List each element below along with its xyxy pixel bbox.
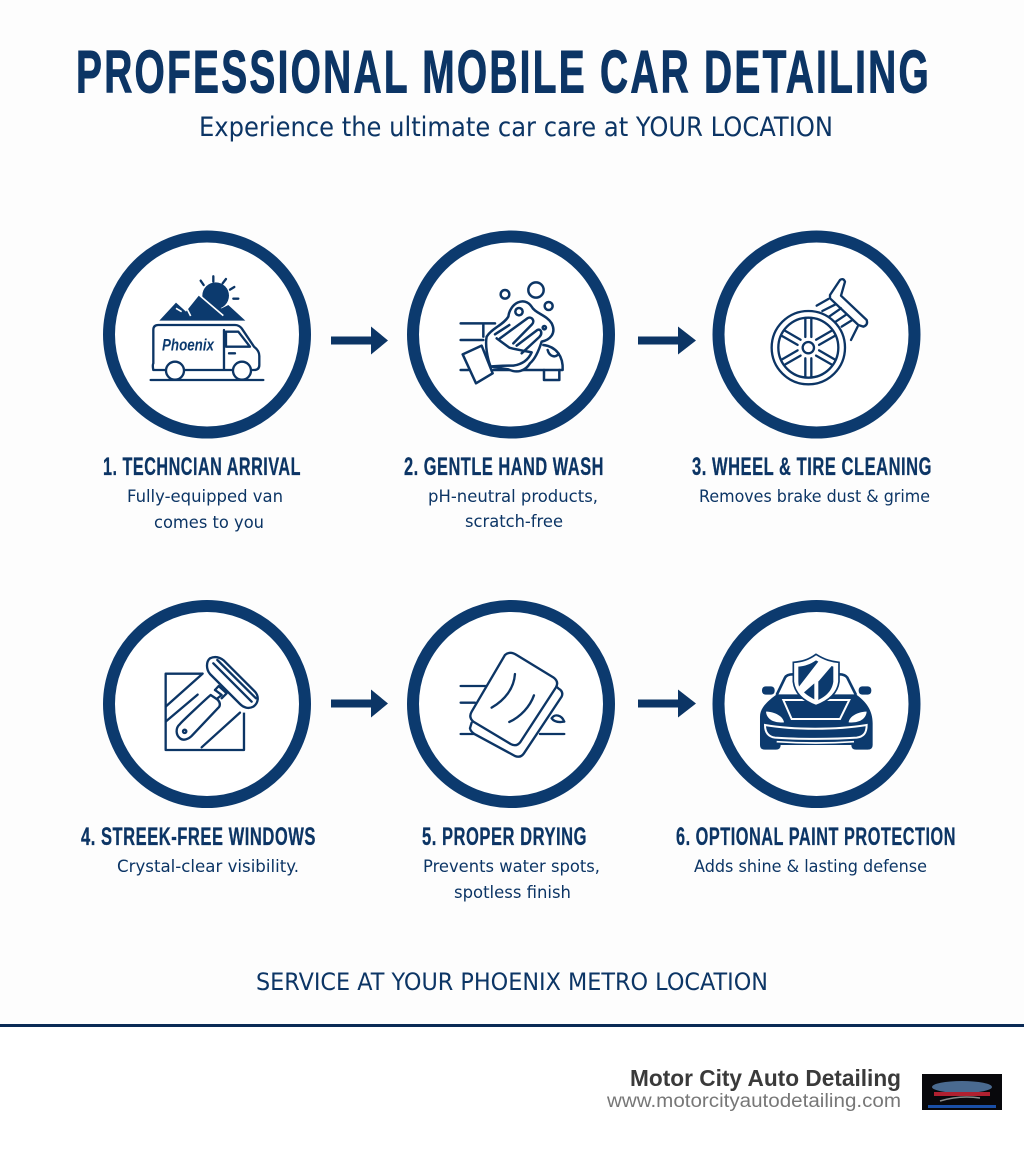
step 4 description: Crystal-clear visibility. [117,857,299,877]
step 3 description: Removes brake dust & grime [699,487,930,507]
step 1 description: Fully-equipped van [127,487,283,507]
step 2: gentle hand wash [404,236,609,532]
step 1 heading: 1. TECHNCIAN ARRIVAL [103,453,301,481]
step 4: streak-free windows [81,606,316,877]
step 6 description: Adds shine & lasting defense [694,857,927,877]
step 1 description: comes to you [154,513,264,533]
step 5 description [423,857,600,903]
footer brand [606,1065,901,1112]
step 5 heading: 5. PROPER DRYING [422,823,587,851]
step 1 ring [109,236,305,432]
step 4 heading: 4. STREEK-FREE WINDOWS [81,823,316,851]
subtitle: Experience the ultimate car care at YOUR LOCATION [199,112,833,143]
step 3 ring [718,236,914,432]
website: www.motorcityautodetailing.com [606,1091,901,1112]
service area statement: SERVICE AT YOUR PHOENIX METRO LOCATION [256,968,768,996]
step 2 description: pH-neutral products, [428,487,598,507]
arrow 5 to 6 [638,690,696,718]
step 5 description: spotless finish [454,883,571,903]
step 6 ring [718,606,914,802]
arrow 2 to 3 [638,326,696,354]
step 6: optional paint protection [676,606,956,877]
step 2 ring [413,236,609,432]
brand name: Motor City Auto Detailing [630,1065,901,1091]
step 3: wheel and tire cleaning [692,236,932,507]
step 2 heading: 2. GENTLE HAND WASH [404,453,604,481]
icon: van with mountains and sun: Phoenix [162,335,215,354]
icon: car with shield [760,654,873,750]
icon: hand washing car with sponge [461,282,563,383]
step 5 description: Prevents water spots, [423,857,600,877]
icon: van with mountains and sun [151,276,263,380]
step 1: technician arrival [103,236,305,533]
arrow 4 to 5 [331,690,388,718]
icon: microfiber towel [461,653,564,757]
step 2 description [428,487,598,532]
icon: squeegee on window [166,657,258,750]
step 5 ring [413,606,609,802]
step 5: proper drying [413,606,609,903]
logo [922,1074,1002,1110]
step 2 description: scratch-free [465,512,563,532]
icon: wheel and brush [772,279,867,384]
arrow 1 to 2 [331,326,388,354]
step 4 ring [109,606,305,802]
step 1 description [127,487,283,533]
